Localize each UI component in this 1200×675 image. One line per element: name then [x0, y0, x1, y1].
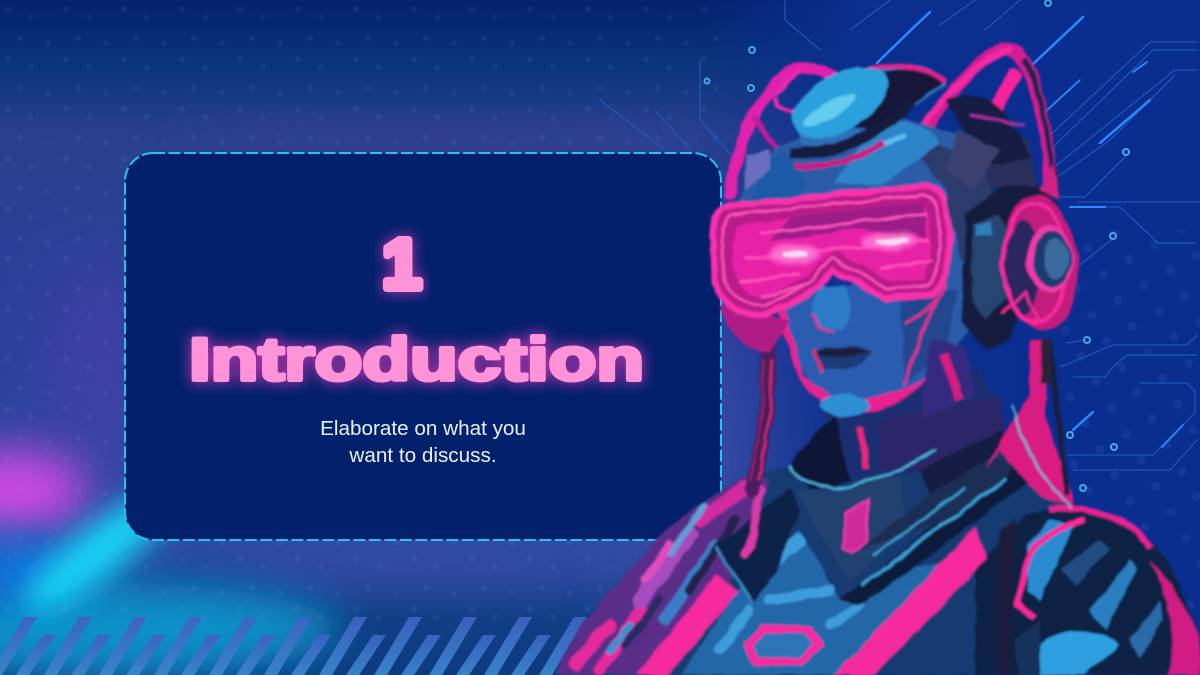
cyan light streak	[9, 475, 187, 629]
right neck glow	[985, 340, 1075, 507]
helmet crown	[798, 65, 945, 152]
earpiece housing	[962, 185, 1060, 350]
pink chest straps	[636, 575, 738, 675]
glowing eyes	[770, 244, 820, 264]
hanging cables right	[1046, 340, 1066, 495]
helmet ridge	[790, 102, 912, 153]
chest plate	[680, 530, 960, 675]
hanging cables left	[750, 345, 772, 490]
heading glow: Introduction	[189, 326, 644, 393]
description: Elaborate on what you	[320, 417, 526, 440]
dark lapel left	[716, 487, 800, 603]
nose	[812, 285, 850, 330]
decorative stripes	[0, 617, 587, 675]
cheek glow lines	[905, 285, 945, 385]
right shoulder trim	[1017, 520, 1085, 618]
section number: 1	[383, 225, 421, 303]
left helmet side	[745, 150, 770, 190]
chest bib	[795, 470, 905, 583]
helmet body	[737, 118, 1000, 350]
panel: introduction card	[125, 153, 721, 540]
lips	[815, 346, 872, 370]
collar pendant	[843, 500, 868, 553]
left hair	[720, 305, 790, 352]
left shoulder armor	[556, 476, 770, 675]
dark lapel right	[840, 460, 1030, 605]
torso and shoulders	[556, 430, 1200, 675]
right shoulder armor	[975, 505, 1200, 675]
left headband arc	[730, 67, 835, 195]
cyan helmet lens	[781, 53, 899, 153]
number glow: 1	[383, 225, 421, 303]
circuit lines	[600, 0, 1200, 491]
figure: cyberpunk woman illustration	[556, 48, 1200, 675]
speaker centre	[1027, 225, 1073, 293]
goggle lens	[732, 205, 931, 298]
heading: Introduction	[189, 326, 644, 393]
neck	[800, 370, 1005, 480]
magenta glow	[0, 450, 87, 530]
goggles	[713, 186, 949, 317]
speaker outer ring	[997, 193, 1083, 333]
collar	[790, 415, 850, 490]
chest emblem	[748, 628, 818, 662]
face	[775, 280, 960, 412]
description: want to discuss.	[348, 444, 497, 467]
bright streaks	[877, 12, 1183, 447]
right headband arc	[905, 48, 1055, 190]
